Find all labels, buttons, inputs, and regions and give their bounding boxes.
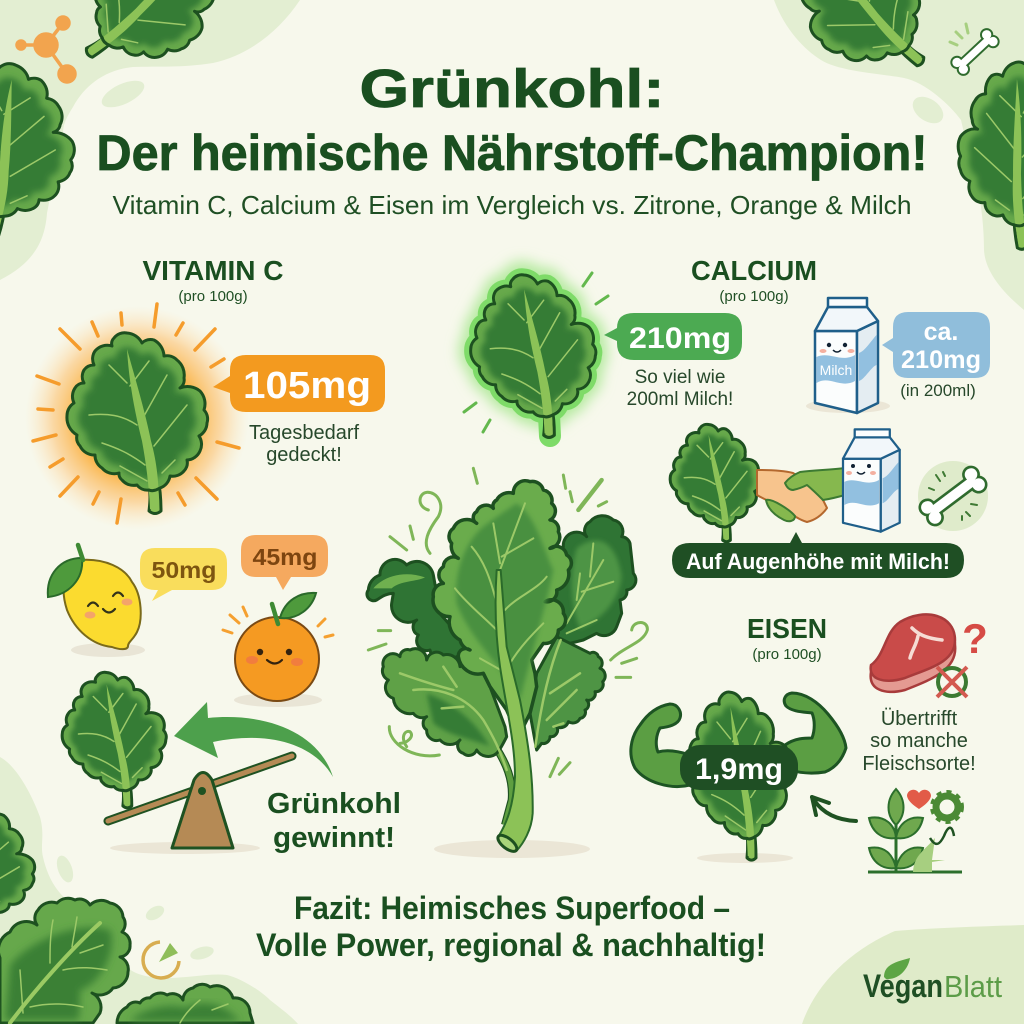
panel: vitamin c [25, 255, 401, 854]
heading: calcium [691, 255, 817, 305]
callout: 45mg [241, 535, 328, 590]
text: gruenkohl gewinnt [267, 788, 401, 854]
callout: 1,9mg [680, 745, 798, 790]
arrow: small [812, 797, 856, 821]
text: fleisch: Übertrifft [881, 708, 958, 730]
heading: eisen: (pro 100g) [752, 646, 822, 663]
conclusion: Fazit: Heimisches Superfood – [294, 890, 730, 926]
icon: orange [223, 593, 333, 707]
icon: handshake leaf [670, 424, 760, 542]
callout: 1,9mg: 1,9mg [695, 753, 783, 786]
heading: calcium: CALCIUM [691, 255, 817, 286]
callout: ca. 210mg [882, 312, 990, 378]
icon: glowing leaf [464, 271, 608, 437]
icon: progress ring [143, 942, 179, 978]
callout: ca. 210mg: 210mg [901, 346, 981, 374]
icon: plant with heart and gear [868, 789, 962, 872]
leaf: right lower [530, 637, 605, 750]
icon: milk carton: Milch [820, 362, 852, 378]
leaf: right upper [547, 516, 636, 647]
icon: seesaw [62, 672, 292, 854]
icon: lemon [48, 545, 145, 657]
text: tagesbedarf: gedeckt! [266, 444, 342, 466]
heading: calcium: (pro 100g) [719, 288, 789, 305]
callout: 105mg: 105mg [243, 365, 371, 407]
arrow: green [174, 702, 333, 777]
text: so viel wie: 200ml Milch! [627, 389, 733, 410]
logo: veganblatt: Blatt [944, 969, 1002, 1004]
callout: 105mg [213, 355, 385, 412]
title: Der heimische Nährstoff-Champion! [96, 125, 928, 181]
leaf: back left [367, 559, 471, 663]
panel: eisen [631, 613, 988, 872]
text: gruenkohl gewinnt: gewinnt! [273, 822, 395, 854]
stem: main [495, 570, 533, 854]
heading: eisen [747, 613, 827, 663]
icon: corner bone [948, 24, 1002, 79]
callout: 50mg: 50mg [152, 557, 216, 583]
icon: carton handshake [843, 429, 900, 532]
conclusion [256, 890, 766, 963]
text: fleisch: so manche [870, 730, 968, 752]
banner: auf augenhoehe [672, 532, 964, 578]
text: tagesbedarf [249, 422, 359, 466]
text: in 200ml: (in 200ml) [900, 381, 976, 400]
icon: handshake [757, 468, 845, 522]
text: fleisch: Fleischsorte! [862, 753, 976, 775]
leaf: lower left [382, 649, 512, 825]
callout: 45mg: 45mg [252, 544, 318, 570]
title [96, 59, 928, 181]
callout: 50mg [140, 548, 227, 601]
icon: milk carton [806, 298, 890, 413]
subtitle: Vitamin C, Calcium & Eisen im Vergleich vs. Zitrone, Orange & Milch [112, 190, 912, 220]
callout: 210mg: 210mg [629, 322, 731, 355]
callout: ca. 210mg: ca. [924, 318, 958, 346]
text: so viel wie [627, 367, 733, 410]
corner leaves top [0, 0, 1024, 260]
heading: eisen: EISEN [747, 613, 827, 644]
logo: veganblatt: Vegan [863, 968, 943, 1004]
icon: muscle leaf [631, 692, 846, 863]
illustration: central kale [367, 468, 647, 858]
callout: 210mg [604, 313, 742, 360]
icon: molecule [17, 17, 75, 82]
panel: calcium [464, 255, 991, 578]
conclusion: Volle Power, regional & nachhaltig! [256, 927, 766, 963]
title: Grünkohl: [360, 59, 664, 119]
decorative swirls [368, 468, 647, 777]
logo: veganblatt [863, 958, 1002, 1004]
heading: vitamin c: VITAMIN C [142, 255, 284, 286]
leaf: main [433, 481, 571, 737]
heading: vitamin c [142, 255, 284, 305]
icon: glowing leaf [25, 304, 249, 530]
icon: steak [871, 614, 967, 697]
banner: auf augenhoehe: Auf Augenhöhe mit Milch! [686, 549, 950, 574]
icon: question mark: ? [962, 615, 988, 662]
text: tagesbedarf: Tagesbedarf [249, 422, 359, 444]
text: fleisch [862, 708, 976, 775]
text: so viel wie: So viel wie [635, 367, 725, 388]
corner leaves bottom [0, 792, 253, 1023]
text: gruenkohl gewinnt: Grünkohl [267, 788, 401, 820]
icon: bone circle [915, 461, 991, 531]
heading: vitamin c: (pro 100g) [178, 288, 248, 305]
